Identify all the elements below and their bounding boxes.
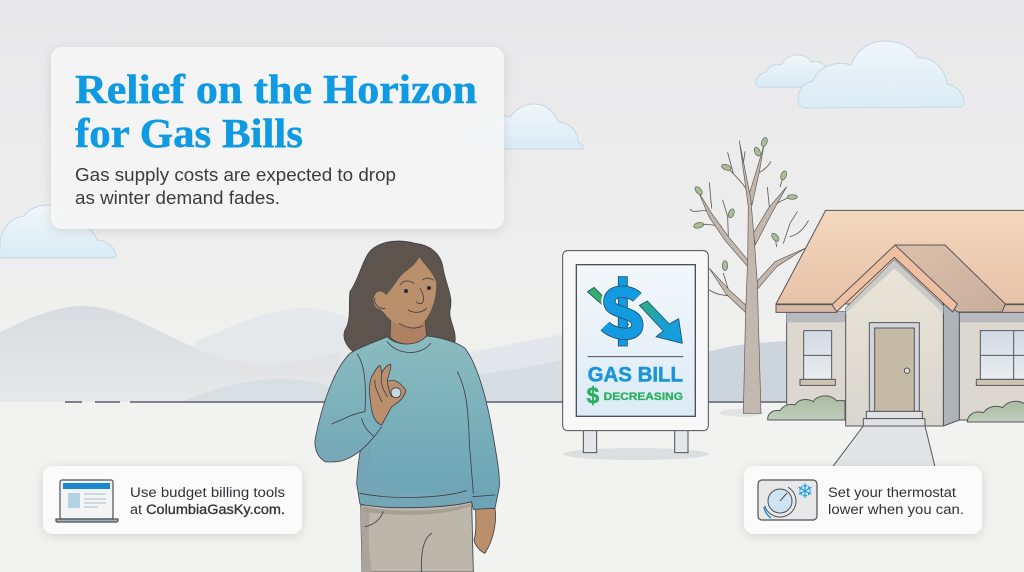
sign heading: GAS BILL	[588, 364, 683, 387]
eaves	[776, 305, 1024, 312]
house	[768, 210, 1024, 467]
icon: thermostat	[758, 479, 817, 523]
cloud: upper right small	[756, 55, 825, 87]
cloud: left	[0, 205, 116, 258]
steps	[863, 411, 925, 426]
subtitle line 2: as winter demand fades.	[75, 188, 280, 208]
right wall	[959, 312, 1024, 420]
sign posts	[583, 430, 688, 453]
left bush	[768, 396, 845, 420]
sign status: DECREASING	[604, 391, 683, 403]
tip text: Use budget billing tools	[130, 485, 285, 500]
icon: dollar with falling arrow	[587, 277, 682, 346]
tip text line 2: lower when you can.	[828, 502, 964, 517]
woman	[315, 241, 499, 572]
distant hills	[0, 306, 790, 402]
door frame	[869, 323, 919, 411]
sweater	[315, 336, 499, 509]
sign dollar: $	[587, 382, 600, 408]
icon: laptop	[56, 480, 118, 522]
tip text: Set your thermostat	[828, 485, 956, 500]
cloud: behind title card	[469, 104, 583, 149]
walkway	[833, 426, 935, 467]
gable trim	[832, 245, 957, 312]
heading: Relief on the Horizon	[75, 66, 477, 112]
porch front	[846, 260, 943, 426]
tree	[690, 137, 808, 417]
left wall	[787, 312, 847, 419]
neck	[390, 320, 427, 344]
sign board	[563, 251, 708, 431]
left hand	[370, 364, 406, 425]
right hand	[474, 508, 496, 553]
trousers	[361, 502, 473, 572]
cloud: upper right large	[798, 41, 964, 108]
door	[875, 328, 914, 411]
face	[374, 257, 436, 327]
left window	[800, 331, 835, 385]
right bush	[967, 401, 1024, 422]
title card	[51, 47, 504, 229]
sign shadow	[563, 448, 709, 460]
tip card: budget billing	[43, 466, 302, 534]
horizon line	[65, 401, 790, 403]
heading line 2: for Gas Bills	[75, 110, 303, 156]
porch side wall	[943, 303, 959, 426]
gable side	[893, 245, 1005, 312]
subtitle: Gas supply costs are expected to drop	[75, 165, 396, 185]
hair	[344, 241, 455, 353]
icon: thermostat: ❄	[797, 479, 813, 503]
tip card: thermostat	[744, 466, 982, 534]
sweater folds	[332, 342, 495, 497]
sign screen	[576, 265, 695, 416]
main roof	[776, 210, 1024, 304]
tip text line 2: at ColumbiaGasKy.com.	[130, 502, 285, 517]
sign divider	[588, 355, 683, 358]
yard sign	[563, 251, 709, 460]
facial features	[399, 278, 433, 328]
right window	[976, 331, 1024, 385]
